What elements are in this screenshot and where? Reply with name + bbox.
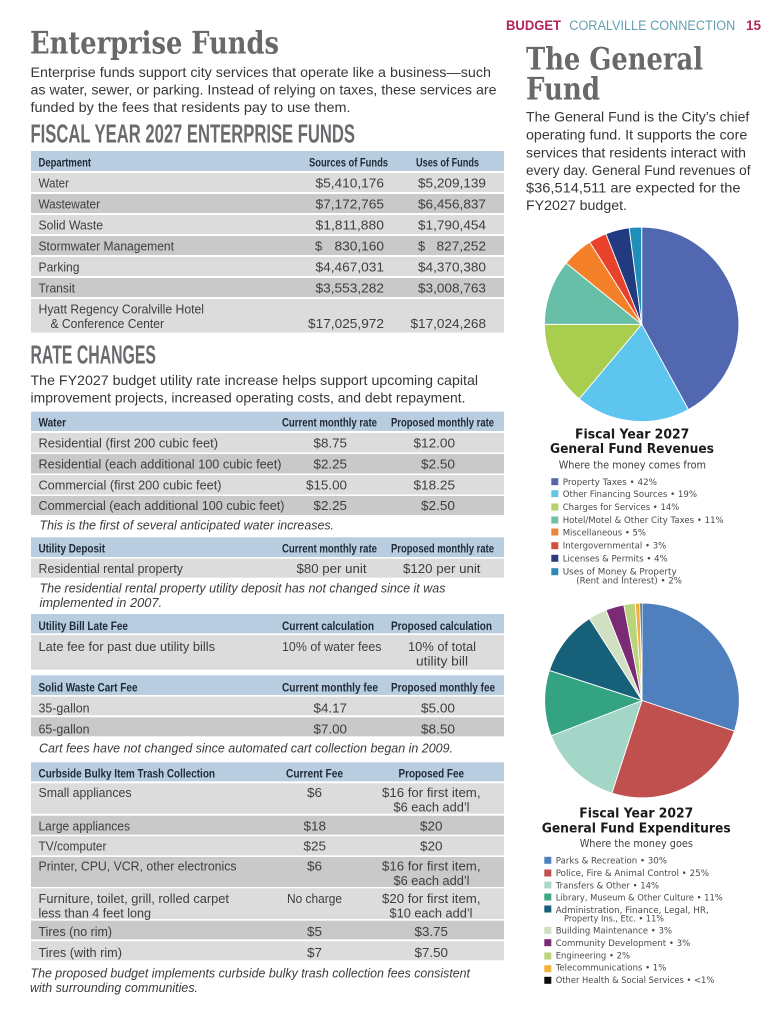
chart heading: general fund expenditures: General Fund Expenditures xyxy=(542,822,731,837)
row: printer and electronics: $6 each add’l xyxy=(394,873,470,888)
pie chart: general fund revenues xyxy=(544,227,739,422)
row: Hyatt Regency xyxy=(31,299,504,332)
text block: enterprise funds intro: funded by the fees that residents pay to use them. xyxy=(30,99,350,115)
row: Stormwater Management: $ xyxy=(418,238,425,254)
text block: general fund intro xyxy=(526,109,751,213)
row: small appliances: $16 for first item, xyxy=(382,785,480,800)
cart fee header row: Solid Waste Cart Fee xyxy=(38,680,138,694)
legend: expenditures: Other Health & Social Services • <1% xyxy=(556,975,715,986)
row: 65-gallon: $8.50 xyxy=(421,721,455,736)
row: Hyatt Regency: Hyatt Regency Coralville Hotel xyxy=(38,301,204,316)
legend: expenditures: Property Ins., Etc. • 11% xyxy=(564,913,664,924)
page header: CORALVILLE CONNECTION xyxy=(569,18,735,33)
water header row: Current monthly rate xyxy=(282,416,377,430)
row: Wastewater: $7,172,765 xyxy=(316,197,384,212)
legend: revenues: Property Taxes • 42% xyxy=(563,477,657,488)
row: commercial first 200: Commercial (first 200 cubic feet) xyxy=(38,477,222,492)
legend: expenditures: Transfers & Other • 14% xyxy=(555,880,659,891)
chart heading: general fund revenues: Where the money comes from xyxy=(559,459,706,471)
table: solid waste cart fee xyxy=(31,675,504,736)
row: residential first 200 xyxy=(31,433,504,452)
utility deposit header row: Proposed monthly rate xyxy=(391,541,494,555)
note: utility deposit: The residential rental property utility deposit has not changed since it was xyxy=(40,581,446,596)
row: large appliances: Large appliances xyxy=(38,819,130,834)
row: commercial first 200: $15.00 xyxy=(306,477,347,492)
note: water increases: This is the first of several anticipated water increases. xyxy=(40,517,334,532)
row: late fee: 10% of total xyxy=(408,639,476,654)
row: residential rental property: $80 per unit xyxy=(296,561,367,576)
legend: revenues: Uses of Money & Property xyxy=(563,566,677,577)
table: curbside bulky item trash collection xyxy=(31,762,504,960)
table: water rates xyxy=(31,412,504,515)
row: furniture: Furniture, toilet, grill, rolled carpet xyxy=(38,891,229,906)
chart heading: general fund revenues: General Fund Revenues xyxy=(550,442,714,457)
row: residential additional xyxy=(31,454,504,474)
row: residential additional: $2.50 xyxy=(421,456,455,471)
row: Wastewater xyxy=(31,194,504,213)
page header xyxy=(506,18,761,33)
row: printer and electronics xyxy=(31,857,504,888)
note: proposed budget bulky trash: with surrounding communities. xyxy=(30,980,198,995)
row: commercial additional: $2.25 xyxy=(314,498,347,513)
row: Stormwater Management: 827,252 xyxy=(436,238,486,254)
text block: enterprise funds intro xyxy=(30,64,497,115)
row: Hyatt Regency: $17,025,972 xyxy=(308,316,384,331)
row: 65-gallon xyxy=(31,717,504,736)
legend: expenditures: Building Maintenance • 3% xyxy=(556,926,672,937)
heading: Fiscal Year 2027 Enterprise Funds: FISCAL YEAR 2027 ENTERPRISE FUNDS xyxy=(30,121,355,149)
legend: revenues: Charges for Services • 14% xyxy=(563,502,680,513)
row: late fee: Late fee for past due utility bills xyxy=(38,639,215,654)
row: tires no rim: Tires (no rim) xyxy=(38,924,112,939)
row: furniture: No charge xyxy=(287,891,342,906)
row: 35-gallon: $4.17 xyxy=(314,700,347,715)
row: Parking: $4,370,380 xyxy=(418,259,486,274)
table header row: Sources of Funds xyxy=(309,155,388,169)
heading: Rate Changes: RATE CHANGES xyxy=(30,341,156,369)
note: utility deposit: implemented in 2007. xyxy=(40,595,162,610)
row: tires with rim xyxy=(31,941,504,960)
row: Water: $5,209,139 xyxy=(418,176,486,191)
row: Stormwater Management: 830,160 xyxy=(334,238,384,254)
table header row xyxy=(31,151,504,171)
utility deposit header row: Utility Deposit xyxy=(38,541,105,555)
note: proposed budget bulky trash xyxy=(30,966,470,995)
text block: general fund intro: FY2027 budget. xyxy=(526,197,627,213)
row: commercial additional xyxy=(31,496,504,515)
water header row: Water xyxy=(38,416,66,430)
row: 35-gallon: 35-gallon xyxy=(38,700,90,715)
title: The General Fund: Fund xyxy=(526,71,600,107)
legend: revenues: Miscellaneous • 5% xyxy=(563,527,646,538)
legend: revenues: Hotel/Motel & Other City Taxes • 11% xyxy=(563,515,724,526)
row: small appliances xyxy=(31,783,504,814)
utility deposit header row: Current monthly rate xyxy=(282,541,377,555)
legend: expenditures: Library, Museum & Other Culture • 11% xyxy=(556,893,723,904)
row: Solid Waste: $1,790,454 xyxy=(418,218,486,232)
row: tires no rim: $5 xyxy=(307,924,322,939)
table: enterprise funds xyxy=(31,151,504,332)
row: printer and electronics: $16 for first item, xyxy=(382,858,480,873)
row: furniture: $10 each add’l xyxy=(390,905,472,920)
row: residential first 200: Residential (first 200 cubic feet) xyxy=(38,435,218,450)
title: The General Fund xyxy=(526,41,703,107)
text block: general fund intro: every day. General Fund revenues of xyxy=(526,162,751,178)
row: late fee xyxy=(31,635,504,670)
row: residential rental property: $120 per unit xyxy=(403,561,481,576)
row: tires with rim: Tires (with rim) xyxy=(38,945,122,960)
text block: rate changes intro: The FY2027 budget utility rate increase helps support upcoming capital xyxy=(30,372,478,388)
legend: expenditures: Engineering • 2% xyxy=(556,950,630,961)
chart heading: general fund expenditures: Fiscal Year 2027 xyxy=(579,806,693,821)
cart fee header row: Proposed monthly fee xyxy=(391,680,495,694)
row: Water xyxy=(31,173,504,192)
bulky item header row: Current Fee xyxy=(286,766,343,780)
row: Wastewater: $6,456,837 xyxy=(418,197,486,212)
row: TV/computer: TV/computer xyxy=(38,838,107,853)
cart fee header row: Current monthly fee xyxy=(282,680,378,694)
row: Transit: $3,008,763 xyxy=(418,280,486,295)
legend: expenditures xyxy=(544,856,723,986)
row: Transit: Transit xyxy=(38,280,75,295)
row: 35-gallon: $5.00 xyxy=(421,700,455,715)
row: commercial first 200 xyxy=(31,475,504,494)
text block: general fund intro: services that residents interact with xyxy=(526,144,746,160)
bulky item header row xyxy=(31,762,504,781)
bulky item header row: Curbside Bulky Item Trash Collection xyxy=(38,766,215,780)
row: Parking: $4,467,031 xyxy=(316,259,384,274)
legend: revenues: (Rent and Interest) • 2% xyxy=(576,576,682,587)
row: residential rental property xyxy=(31,559,504,578)
chart heading: general fund expenditures: Where the money goes xyxy=(580,838,693,850)
row: late fee: 10% of water fees xyxy=(282,639,382,654)
row: residential first 200: $12.00 xyxy=(414,435,455,450)
table: utility bill late fee xyxy=(31,614,504,670)
late fee header row: Proposed calculation xyxy=(391,619,492,633)
row: small appliances: $6 each add’l xyxy=(394,799,470,814)
page header: 15 xyxy=(746,18,761,33)
chart heading: general fund revenues: Fiscal Year 2027 xyxy=(575,427,689,442)
row: large appliances: $20 xyxy=(420,819,442,834)
water header row: Proposed monthly rate xyxy=(391,416,494,430)
row: small appliances: Small appliances xyxy=(38,785,132,800)
table header row: Department xyxy=(38,155,91,169)
row: Hyatt Regency: $17,024,268 xyxy=(410,316,486,331)
legend: revenues xyxy=(551,477,724,587)
row: residential first 200: $8.75 xyxy=(314,435,347,450)
row: tires with rim: $7.50 xyxy=(414,945,448,960)
text block: enterprise funds intro: Enterprise funds support city services that operate like a business—such xyxy=(30,64,491,80)
text block: general fund intro: operating fund. It supports the core xyxy=(526,126,748,142)
row: Solid Waste: $1,811,880 xyxy=(316,218,384,232)
title: Enterprise Funds: Enterprise Funds xyxy=(30,26,279,62)
row: Wastewater: Wastewater xyxy=(38,197,101,212)
late fee header row xyxy=(31,614,504,633)
note: utility deposit xyxy=(40,581,446,610)
row: commercial additional: Commercial (each additional 100 cubic feet) xyxy=(38,498,284,513)
row: TV/computer: $20 xyxy=(420,838,442,853)
text block: enterprise funds intro: as water, sewer, or parking. Instead of relying on taxes, these services are xyxy=(30,82,497,98)
legend: expenditures: Community Development • 3% xyxy=(556,938,691,949)
legend: revenues: Licenses & Permits • 4% xyxy=(563,553,668,564)
row: Solid Waste xyxy=(31,215,504,234)
row: commercial first 200: $18.25 xyxy=(414,477,455,492)
row: Hyatt Regency: & Conference Center xyxy=(50,316,165,331)
row: late fee: utility bill xyxy=(416,654,468,669)
note: cart fees: Cart fees have not changed since automated cart collection began in 2009. xyxy=(39,741,453,756)
row: Stormwater Management xyxy=(31,236,504,255)
legend: expenditures: Administration, Finance, Legal, HR, xyxy=(556,905,709,916)
page header: BUDGET xyxy=(506,18,562,33)
row: Water: Water xyxy=(38,176,70,191)
row: Transit: $3,553,282 xyxy=(316,280,384,295)
title: The General Fund: The General xyxy=(526,41,703,77)
cart fee header row xyxy=(31,675,504,695)
table: utility deposit xyxy=(31,537,504,578)
row: TV/computer: $25 xyxy=(304,838,326,853)
row: Water: $5,410,176 xyxy=(316,176,384,191)
late fee header row: Current calculation xyxy=(282,619,374,633)
row: tires with rim: $7 xyxy=(307,945,322,960)
row: furniture: $20 for first item, xyxy=(382,891,480,906)
row: commercial additional: $2.50 xyxy=(421,498,455,513)
bulky item header row: Proposed Fee xyxy=(398,766,464,780)
utility deposit header row xyxy=(31,537,504,557)
row: tires no rim: $3.75 xyxy=(414,924,448,939)
note: proposed budget bulky trash: The proposed budget implements curbside bulky trash collection fees consistent xyxy=(30,966,470,981)
row: residential additional: $2.25 xyxy=(314,456,347,471)
row: Transit xyxy=(31,278,504,297)
row: small appliances: $6 xyxy=(307,785,322,800)
row: furniture: less than 4 feet long xyxy=(38,905,151,920)
row: 65-gallon: $7.00 xyxy=(314,721,347,736)
chart heading: general fund revenues xyxy=(550,427,714,471)
row: residential rental property: Residential rental property xyxy=(38,561,184,576)
legend: expenditures: Police, Fire & Animal Control • 25% xyxy=(556,868,709,879)
row: TV/computer xyxy=(31,836,504,855)
row: Stormwater Management: $ xyxy=(315,238,322,254)
table header row: Uses of Funds xyxy=(416,155,479,169)
late fee header row: Utility Bill Late Fee xyxy=(38,619,128,633)
row: 65-gallon: 65-gallon xyxy=(38,721,90,736)
row: printer and electronics: Printer, CPU, VCR, other electronics xyxy=(38,858,236,873)
row: large appliances xyxy=(31,816,504,835)
row: Parking: Parking xyxy=(38,259,80,274)
row: printer and electronics: $6 xyxy=(307,858,322,873)
water header row xyxy=(31,412,504,431)
row: large appliances: $18 xyxy=(304,819,326,834)
text block: general fund intro: The General Fund is the City’s chief xyxy=(526,109,749,125)
row: Solid Waste: Solid Waste xyxy=(38,218,103,232)
legend: expenditures: Parks & Recreation • 30% xyxy=(556,856,667,867)
row: Parking xyxy=(31,257,504,276)
row: 35-gallon xyxy=(31,697,504,715)
legend: revenues: Other Financing Sources • 19% xyxy=(563,489,697,500)
chart heading: general fund expenditures xyxy=(542,806,731,850)
text block: rate changes intro xyxy=(30,372,478,406)
text block: general fund intro: $36,514,511 are expected for the xyxy=(526,179,741,195)
legend: expenditures: Telecommunications • 1% xyxy=(555,963,667,974)
pie chart: general fund expenditures xyxy=(545,603,739,798)
row: Stormwater Management: Stormwater Management xyxy=(38,238,174,254)
row: furniture xyxy=(31,888,504,920)
legend: revenues: Intergovernmental • 3% xyxy=(563,540,667,551)
row: tires no rim xyxy=(31,921,504,939)
row: residential additional: Residential (each additional 100 cubic feet) xyxy=(38,456,282,471)
text block: rate changes intro: improvement projects, increased operating costs, and debt repayment. xyxy=(30,390,466,406)
